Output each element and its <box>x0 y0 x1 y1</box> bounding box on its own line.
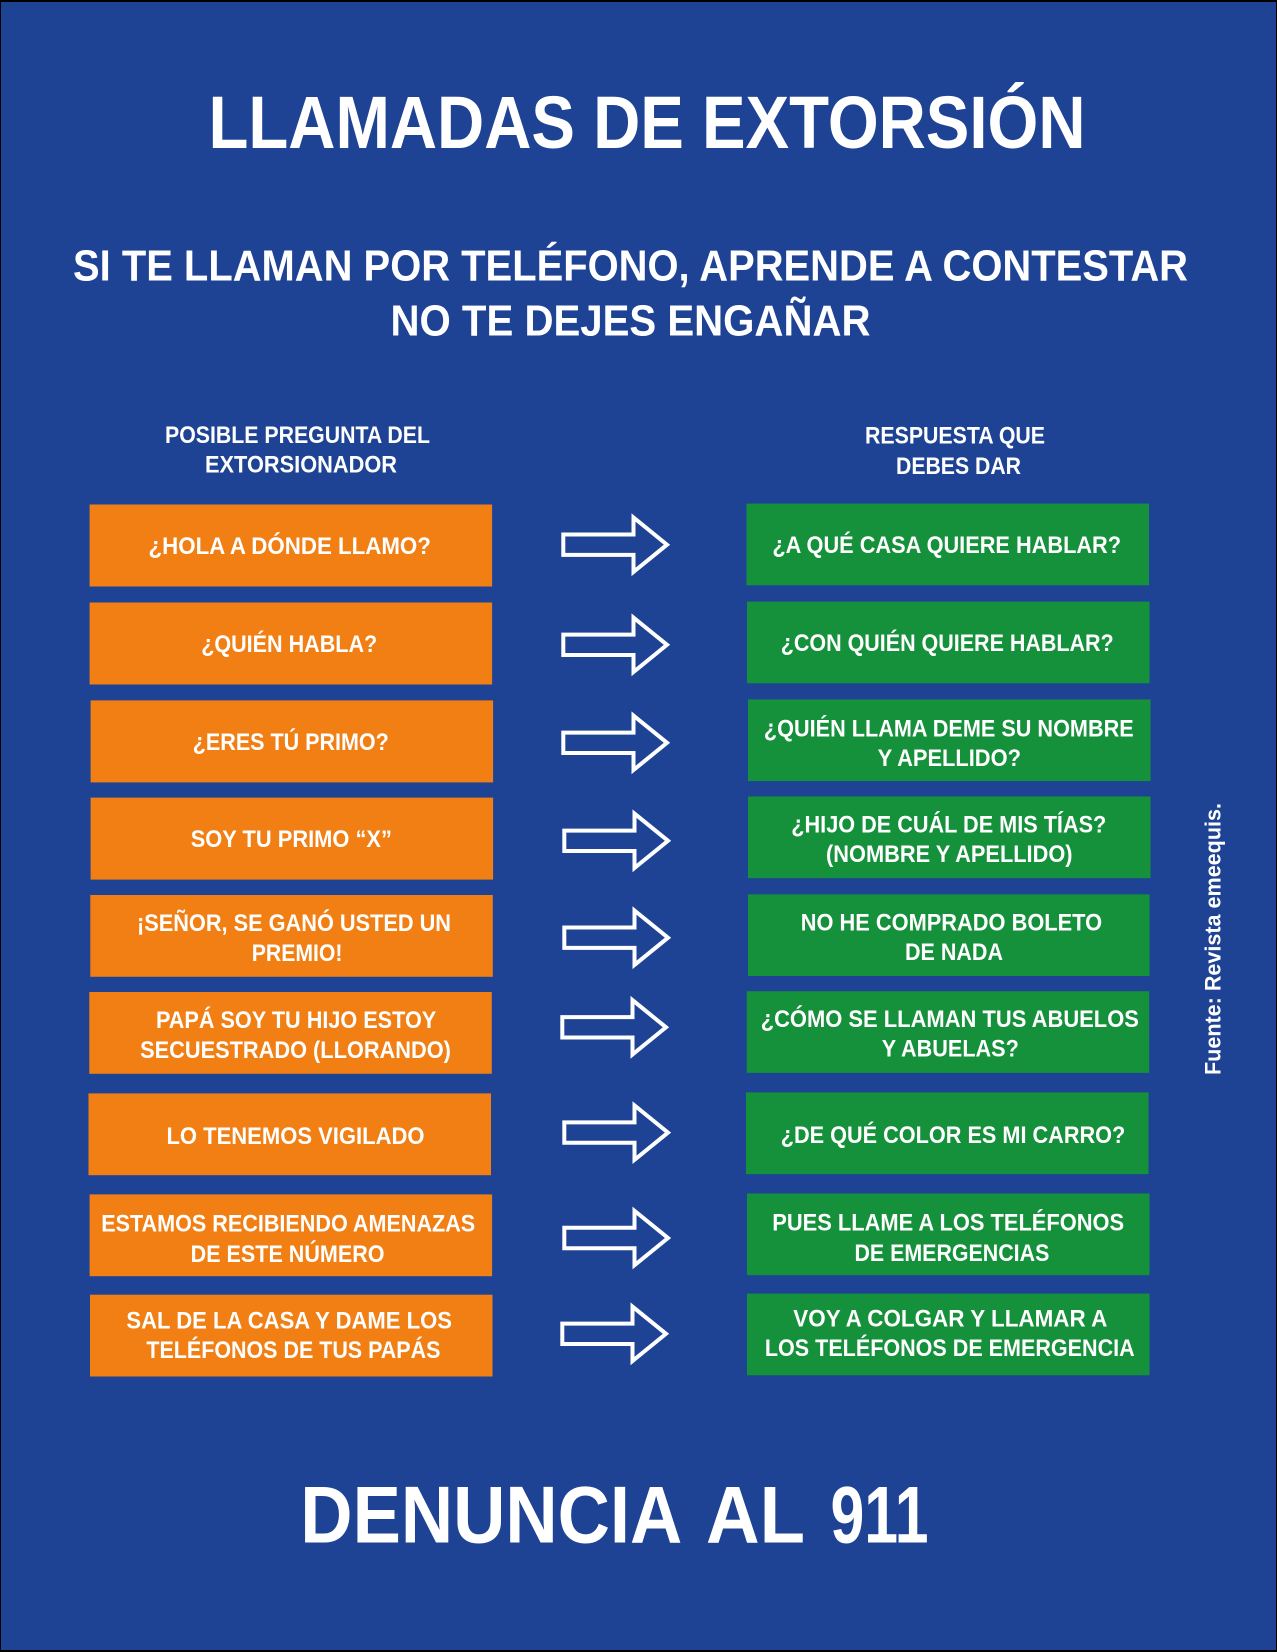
arrow 8 <box>564 1211 668 1265</box>
answer box 1 <box>746 504 1149 585</box>
question box 6: SECUESTRADO (LLORANDO) <box>140 1037 451 1064</box>
question box 2: ¿QUIÉN HABLA? <box>201 630 377 658</box>
answer box 2: ¿CON QUIÉN QUIERE HABLAR? <box>781 629 1114 657</box>
question box 6 <box>89 992 492 1074</box>
answer box 8: PUES LLAME A LOS TELÉFONOS <box>772 1208 1124 1236</box>
question box 6: PAPÁ SOY TU HIJO ESTOY <box>156 1006 436 1034</box>
arrow 5 <box>564 910 668 965</box>
subtitle: SI TE LLAMAN POR TELÉFONO, APRENDE A CONTESTAR <box>73 240 1188 290</box>
subtitle <box>73 240 1188 346</box>
column heading: answer: DEBES DAR <box>896 453 1021 480</box>
answer box 9: VOY A COLGAR Y LLAMAR A <box>793 1306 1107 1332</box>
answer box 5 <box>748 894 1150 976</box>
answer box 3: ¿QUIÉN LLAMA DEME SU NOMBRE <box>764 714 1134 742</box>
answer box 2 <box>747 602 1150 683</box>
question box 8 <box>90 1194 492 1276</box>
title: LLAMADAS DE EXTORSIÓN <box>208 81 1086 164</box>
question box 7 <box>88 1093 491 1175</box>
answer box 3: Y APELLIDO? <box>878 745 1021 772</box>
question box 3: ¿ERES TÚ PRIMO? <box>193 728 389 756</box>
answer box 4: (NOMBRE Y APELLIDO) <box>826 841 1073 868</box>
question box 9: SAL DE LA CASA Y DAME LOS <box>126 1308 452 1335</box>
question box 8: DE ESTE NÚMERO <box>191 1240 385 1268</box>
question box 3 <box>91 700 493 782</box>
question box 5: PREMIO! <box>252 940 342 967</box>
arrow 7 <box>564 1105 668 1160</box>
answer box 9 <box>747 1294 1150 1375</box>
question box 8: ESTAMOS RECIBIENDO AMENAZAS <box>101 1210 475 1238</box>
question box 7: LO TENEMOS VIGILADO <box>166 1123 425 1150</box>
answer box 8 <box>747 1194 1150 1275</box>
question box 4 <box>91 798 493 880</box>
answer box 1: ¿A QUÉ CASA QUIERE HABLAR? <box>772 531 1121 559</box>
question box 1: ¿HOLA A DÓNDE LLAMO? <box>149 532 431 560</box>
column heading: question <box>165 422 430 478</box>
answer box 4 <box>748 796 1150 878</box>
answer box 5: DE NADA <box>905 939 1003 966</box>
answer box 4: ¿HIJO DE CUÁL DE MIS TÍAS? <box>791 810 1106 838</box>
question box 5 <box>90 895 493 977</box>
call to action: 911 <box>830 1471 928 1561</box>
answer box 6 <box>747 991 1149 1073</box>
source credit: Fuente: Revista emeequis. <box>1201 803 1226 1075</box>
arrow 3 <box>563 716 667 770</box>
answer box 6: Y ABUELAS? <box>882 1036 1019 1063</box>
arrow 9 <box>562 1307 666 1361</box>
call to action <box>300 1471 928 1561</box>
arrow 1 <box>563 518 667 572</box>
column heading: answer: RESPUESTA QUE <box>865 422 1045 450</box>
call to action: DENUNCIA <box>300 1471 682 1561</box>
column heading: answer <box>865 422 1045 480</box>
answer box 6: ¿CÓMO SE LLAMAN TUS ABUELOS <box>761 1005 1139 1033</box>
answer box 9: LOS TELÉFONOS DE EMERGENCIA <box>765 1334 1135 1362</box>
column heading: question: POSIBLE PREGUNTA DEL <box>165 422 430 449</box>
question box 2 <box>90 602 492 684</box>
answer box 7 <box>746 1092 1148 1174</box>
arrow 4 <box>564 814 668 868</box>
question box 9: TELÉFONOS DE TUS PAPÁS <box>146 1336 440 1364</box>
answer box 8: DE EMERGENCIAS <box>854 1240 1049 1267</box>
question box 1 <box>90 504 492 586</box>
answer box 7: ¿DE QUÉ COLOR ES MI CARRO? <box>781 1121 1125 1149</box>
answer box 3 <box>748 699 1150 781</box>
subtitle: NO TE DEJES ENGAÑAR <box>390 296 870 346</box>
question box 4: SOY TU PRIMO “X” <box>191 826 392 853</box>
arrow 6 <box>562 1000 666 1054</box>
question box 9 <box>90 1295 492 1376</box>
question box 5: ¡SEÑOR, SE GANÓ USTED UN <box>137 909 451 937</box>
answer box 5: NO HE COMPRADO BOLETO <box>801 909 1102 936</box>
arrow 2 <box>563 618 667 672</box>
column heading: question: EXTORSIONADOR <box>205 452 397 478</box>
call to action: AL <box>706 1471 805 1561</box>
